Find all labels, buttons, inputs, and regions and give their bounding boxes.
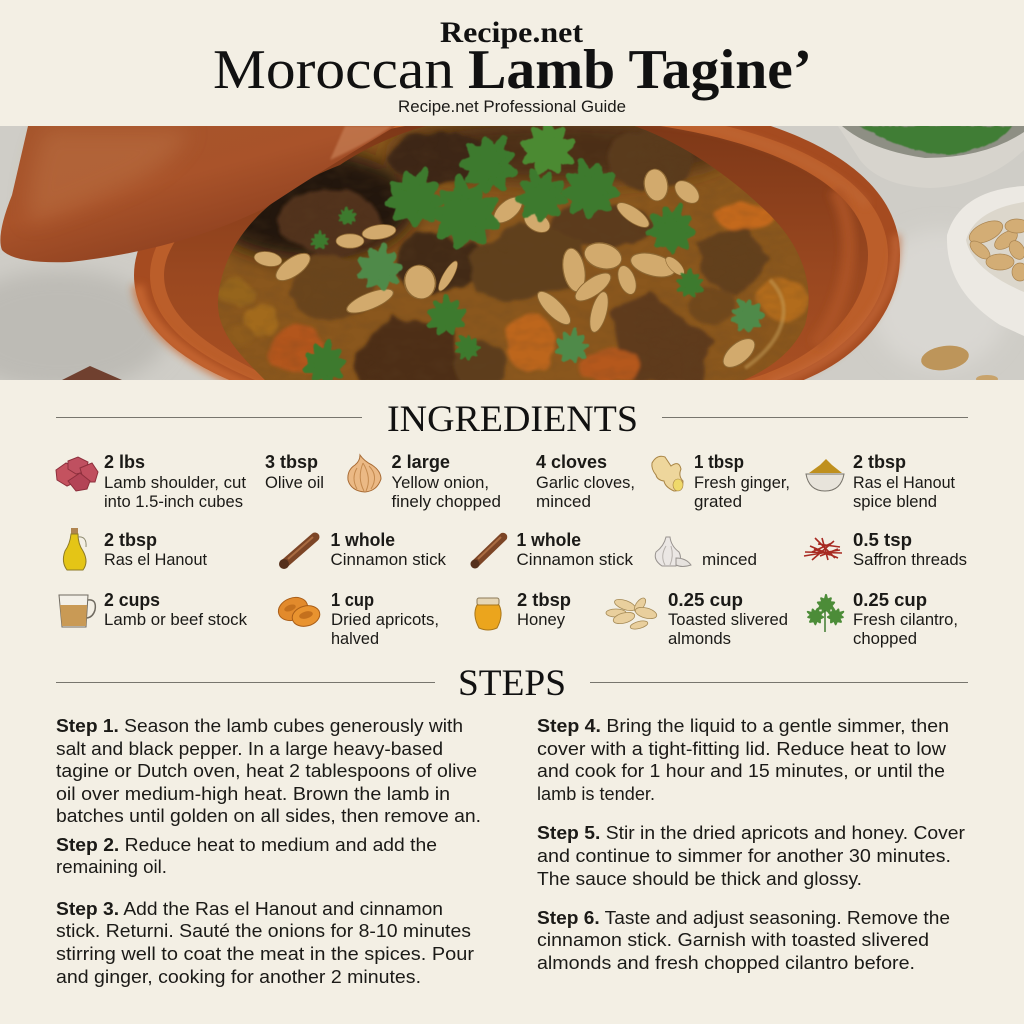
step 5: and continue to simmer for another 30 minutes. <box>537 845 951 866</box>
ingredient: garlic cloves: minced <box>536 493 591 511</box>
ingredient: cilantro <box>804 590 958 648</box>
ingredient: cinnamon stick <box>279 530 447 569</box>
almonds garnish <box>253 167 760 373</box>
ingredient: stock jug <box>59 590 248 629</box>
ingredient: spice bowl: spice blend <box>853 493 937 511</box>
step 2: remaining oil. <box>56 856 167 877</box>
recipe title: Lamb Tagine’ <box>468 39 812 101</box>
ingredient: oil bottle <box>63 528 207 570</box>
ingredient: dried apricots: Dried apricots, <box>331 611 439 629</box>
ingredient: olive oil <box>265 452 324 492</box>
ingredient: ginger <box>652 452 790 511</box>
step 4: and cook for 1 hour and 15 minutes, or until the <box>537 760 945 781</box>
steps heading: STEPS <box>458 663 566 704</box>
ingredient: dried apricots: 1 cup <box>331 590 374 610</box>
step 6: almonds and fresh chopped cilantro before. <box>537 952 915 973</box>
ingredient: stock jug: 2 cups <box>104 590 160 610</box>
step 3: stirring well to coat the meat in the spices. Pour <box>56 943 474 964</box>
step 6: cinnamon stick. Garnish with toasted slivered <box>537 929 929 950</box>
ingredient: lamb: into 1.5-inch cubes <box>104 493 243 511</box>
step 1: salt and black pepper. In a large heavy-based <box>56 738 443 759</box>
brand name: Recipe.net <box>440 16 583 49</box>
ingredient: cilantro: Fresh cilantro, <box>853 611 958 629</box>
ingredient: garlic cloves: Garlic cloves, <box>536 474 635 492</box>
ingredient: almonds: Toasted slivered <box>668 611 788 629</box>
ingredient: garlic cloves <box>536 452 635 511</box>
ingredients heading: INGREDIENTS <box>387 399 638 440</box>
recipe title: Moroccan <box>213 39 454 101</box>
ingredient: almonds: 0.25 cup <box>668 590 743 610</box>
subtitle: Recipe.net Professional Guide <box>398 98 626 116</box>
ingredient: onion: 2 large <box>392 452 450 472</box>
ingredient: cinnamon stick: 1 whole <box>516 530 581 550</box>
ingredient: dried apricots: halved <box>331 630 379 648</box>
ingredient: almonds <box>606 590 788 648</box>
step 2 <box>56 834 437 877</box>
step 2: Step 2. Reduce heat to medium and add the <box>56 834 437 855</box>
header title block <box>213 16 812 116</box>
ingredient: almonds: almonds <box>668 630 731 648</box>
step 3: Step 3. Add the Ras el Hanout and cinnamon <box>56 898 443 919</box>
ingredient: saffron: Saffron threads <box>853 551 967 569</box>
step 1 <box>56 715 481 826</box>
step 3 <box>56 898 474 987</box>
ingredient: cilantro: chopped <box>853 630 917 648</box>
ingredient: honey <box>475 590 571 630</box>
step 6: Step 6. Taste and adjust seasoning. Remove the <box>537 907 950 928</box>
ingredient: spice bowl: Ras el Hanout <box>853 474 955 492</box>
step 3: stick. Returni. Sauté the onions for 8-10 minutes <box>56 920 471 941</box>
ingredient: onion <box>348 452 501 511</box>
ingredient: cilantro: 0.25 cup <box>853 590 927 610</box>
step 5: The sauce should be thick and glossy. <box>537 868 862 889</box>
step 1: oil over medium-high heat. Brown the lamb in <box>56 783 450 804</box>
steps left column <box>56 715 481 987</box>
steps right column <box>537 715 965 973</box>
step 6 <box>537 907 950 973</box>
hero photo: lamb tagine <box>0 126 1024 380</box>
step 4: cover with a tight-fitting lid. Reduce heat to low <box>537 738 947 759</box>
ingredient: cinnamon stick <box>470 530 634 569</box>
ingredient: lamb: 2 lbs <box>104 452 145 472</box>
ingredient: oil bottle: 2 tbsp <box>104 530 157 550</box>
loose almond <box>921 346 969 370</box>
ingredient: onion: Yellow onion, <box>392 474 489 492</box>
step 1: batches until golden on all sides, then remove an. <box>56 805 481 826</box>
dark fragment <box>62 366 122 380</box>
ingredient: garlic <box>655 537 757 569</box>
step 4 <box>537 715 949 804</box>
ingredient: spice bowl: 2 tbsp <box>853 452 906 472</box>
ingredient: lamb: Lamb shoulder, cut <box>104 474 246 492</box>
ingredient: garlic cloves: 4 cloves <box>536 452 607 472</box>
step 4: lamb is tender. <box>537 783 655 804</box>
small bowl: almonds <box>947 186 1024 336</box>
ingredient: dried apricots <box>275 590 439 648</box>
step 1: Step 1. Season the lamb cubes generously with <box>56 715 463 736</box>
cilantro garnish <box>303 120 767 384</box>
ingredient: oil bottle: Ras el Hanout <box>104 551 207 569</box>
ingredient: spice bowl <box>806 452 955 511</box>
ingredient: lamb <box>56 452 246 511</box>
step 5: Step 5. Stir in the dried apricots and honey. Cover <box>537 822 965 843</box>
apricot pieces <box>267 326 327 374</box>
recipe title <box>213 39 812 101</box>
ingredient: olive oil: 3 tbsp <box>265 452 318 472</box>
step 1: tagine or Dutch oven, heat 2 tablespoons of olive <box>56 760 477 781</box>
meat chunks <box>280 188 380 256</box>
step 5 <box>537 822 965 889</box>
tagine lid <box>0 126 396 262</box>
ingredient: garlic: minced <box>702 551 757 569</box>
ingredients grid <box>56 452 967 648</box>
ingredient: olive oil: Olive oil <box>265 474 324 492</box>
ingredient: saffron: 0.5 tsp <box>853 530 912 550</box>
ingredient: cinnamon stick: Cinnamon stick <box>330 551 447 569</box>
step 3: and ginger, cooking for another 2 minutes. <box>56 966 421 987</box>
ingredient: saffron <box>804 530 967 569</box>
small bowl: herbs <box>842 126 1024 158</box>
ingredient: cinnamon stick: Cinnamon stick <box>516 551 634 569</box>
tagine base <box>128 126 906 380</box>
ingredient: onion: finely chopped <box>392 493 501 511</box>
ingredient: stock jug: Lamb or beef stock <box>104 611 248 629</box>
ingredient: honey: Honey <box>517 611 566 629</box>
ingredient: ginger: grated <box>694 493 742 511</box>
ingredient: ginger: 1 tbsp <box>694 452 744 472</box>
stew <box>218 126 809 380</box>
ingredient: ginger: Fresh ginger, <box>694 474 790 492</box>
step 4: Step 4. Bring the liquid to a gentle simmer, then <box>537 715 949 736</box>
ingredient: honey: 2 tbsp <box>517 590 571 610</box>
ingredient: cinnamon stick: 1 whole <box>330 530 395 550</box>
